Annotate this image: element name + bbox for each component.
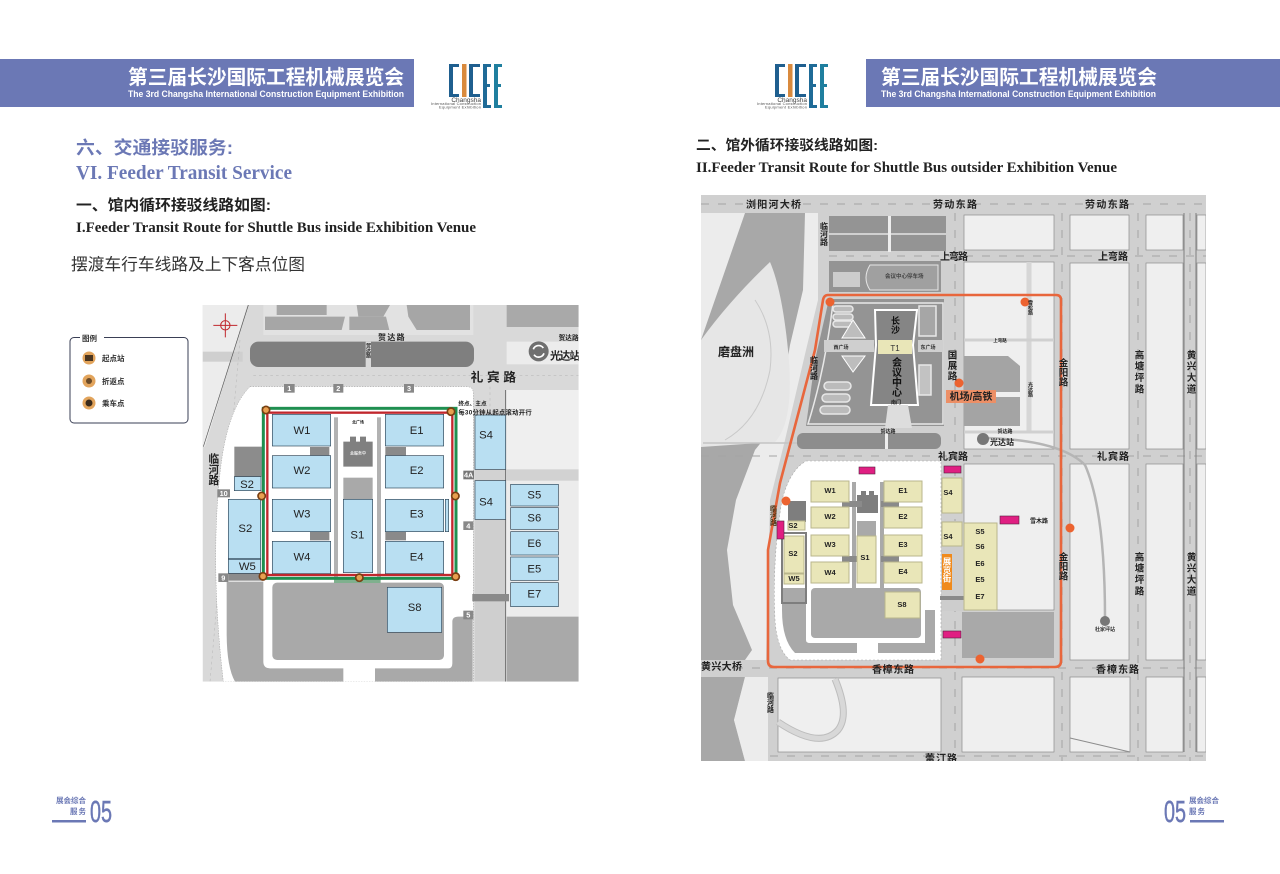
right footer page number: [1164, 794, 1224, 829]
left footer page number: 服务: [70, 806, 86, 816]
gate number markers: 9: [221, 573, 225, 582]
gate number markers: [217, 384, 474, 620]
hall labels: S8: [408, 602, 422, 614]
river and island: [701, 213, 820, 761]
left page CICEE logo: Changsha: [451, 97, 481, 104]
road names: 礼宾路: [938, 450, 968, 463]
convention centre: 会议中心停车场: [885, 272, 924, 280]
road labels: 贺达路: [378, 332, 405, 342]
road names: [701, 198, 1196, 765]
road names: 高塘坪路: [1132, 349, 1144, 395]
section heading: English: VI. Feeder Transit Service: [76, 162, 292, 184]
road names: 临河路: [810, 355, 818, 381]
section heading: Chinese: 六、交通接驳服务:: [76, 137, 233, 158]
gate number markers: 3: [407, 384, 411, 393]
left page CICEE logo: Equipment Exhibition: [439, 104, 481, 110]
metro line to Dujiaping station: 杜家坪站: [1095, 626, 1115, 633]
road names: 上弯路: [940, 250, 968, 263]
left page header banner: 第三届长沙国际工程机械展览会: [128, 66, 404, 89]
right footer page number: 服务: [1189, 806, 1206, 816]
exhibition halls: [228, 414, 558, 632]
hall labels on site map: E4: [898, 567, 908, 576]
hall labels on site map: S6: [975, 542, 985, 551]
hall labels: E7: [527, 589, 541, 601]
convention centre: 长沙: [890, 315, 900, 334]
hall labels on site map: S2: [788, 521, 798, 530]
hall labels: W2: [293, 465, 310, 477]
outside venue shuttle route map: [701, 195, 1206, 765]
road names: 临河路: [820, 221, 828, 247]
convention centre: 会议中心: [890, 356, 902, 397]
road names: 上弯路: [993, 337, 1007, 344]
right page CICEE logo: [757, 64, 828, 110]
hall labels on site map: W5: [788, 574, 800, 583]
hall labels on site map: [788, 486, 985, 609]
hall labels on site map: E2: [898, 512, 908, 521]
road names: 香樟东路: [872, 663, 914, 676]
road names: 雪木路: [1030, 517, 1048, 525]
hall labels on site map: S8: [897, 600, 907, 609]
road names: 贺达路: [880, 428, 896, 435]
road labels: 礼宾路: [471, 370, 516, 385]
hall labels: S4: [479, 496, 493, 508]
hall labels: W4: [293, 552, 310, 564]
orange stops on route: [782, 298, 1074, 664]
gate number markers: 1: [287, 384, 291, 393]
metro line to Dujiaping station: [985, 438, 1115, 633]
right page header banner: 第三届长沙国际工程机械展览会: [881, 66, 1157, 89]
right page header banner: [866, 59, 1280, 107]
gate number markers: 4: [466, 521, 471, 530]
metro icon: Guangda station: [529, 341, 549, 361]
road names: 雪松路: [1027, 299, 1033, 316]
left page CICEE logo: International Construction: [431, 101, 481, 106]
right page header banner: The 3rd Changsha International Construction Equipment Exhibition: [881, 89, 1156, 99]
convention centre: 东广场: [920, 344, 936, 351]
road names: 黄兴大桥: [701, 660, 742, 673]
hall labels on site map: W4: [824, 568, 836, 577]
hall labels on site map: S4: [943, 488, 953, 497]
gate number markers: 10: [220, 489, 228, 498]
left footer page number: 05: [90, 794, 112, 829]
central gate building and plaza: 北广场: [352, 418, 364, 424]
hall labels on site map: S5: [975, 527, 985, 536]
hall labels: W3: [293, 508, 310, 520]
left footer page number: [52, 794, 112, 829]
road labels: 光达站: [550, 349, 580, 362]
hall labels: E1: [410, 425, 424, 437]
road labels: 贺达路: [365, 343, 371, 360]
hall labels: S1: [350, 529, 364, 541]
left page header banner: The 3rd Changsha International Construction Equipment Exhibition: [128, 89, 404, 99]
road names: 蕾汀路: [925, 752, 957, 765]
road labels: 终点、主点: [458, 400, 487, 408]
compass: [213, 313, 237, 337]
parking and grey lots south of halls: [227, 447, 473, 682]
shuttle stops: [258, 406, 459, 581]
hall labels: S4: [479, 429, 493, 441]
subheading: inside venue route Chinese: 一、馆内循环接驳线路如图:: [76, 196, 271, 214]
central gate building and plaza: 总服务中: [350, 450, 366, 456]
subheading: inside venue route English: I.Feeder Transit Route for Shuttle Bus inside Exhibition Venue: [76, 220, 477, 236]
hall labels: [238, 425, 541, 614]
hall labels: E2: [410, 465, 424, 477]
legend item: boarding point: 乘车点: [102, 398, 125, 408]
road labels: 每30分钟从起点滚动开行: [458, 407, 532, 416]
central gate building and plaza: [310, 417, 406, 583]
hall labels on site map: W2: [824, 512, 836, 521]
hall labels on site map: W1: [824, 486, 836, 495]
convention centre: T1: [890, 344, 900, 353]
hall labels on site map: S1: [860, 553, 870, 562]
gate number markers: 5: [466, 611, 470, 620]
hall labels: E6: [527, 538, 541, 550]
magenta bus stop markers: [777, 466, 1019, 638]
road names: 光达路: [1027, 381, 1033, 398]
hall labels: E3: [410, 508, 424, 520]
darker edges of Huangxing Avenue: [1184, 213, 1196, 752]
hall labels on site map: W3: [824, 540, 836, 549]
hall labels on site map: E6: [975, 559, 985, 568]
road names: 劳动东路: [933, 198, 977, 211]
convention centre: 西广场: [833, 344, 849, 351]
hall labels: W5: [239, 561, 256, 573]
road names: 金阳路: [1056, 551, 1068, 581]
legend: [70, 333, 188, 423]
map caption: 摆渡车行车线路及上下客点位图: [71, 255, 305, 274]
hall labels on site map: E3: [898, 540, 908, 549]
road names: 高塘坪路: [1132, 551, 1144, 597]
road names: 礼宾路: [1097, 450, 1129, 463]
right footer page number: 展会综合: [1189, 795, 1220, 805]
road names: 黄兴大道: [1184, 551, 1196, 597]
hall labels: S2: [238, 523, 252, 535]
road labels: [207, 332, 580, 486]
legend item: start stop: 起点站: [102, 353, 125, 363]
hall labels: S2: [240, 479, 254, 491]
gate number markers: 4A: [464, 471, 474, 480]
hall labels: W1: [293, 425, 310, 437]
right page CICEE logo: International Construction: [757, 101, 807, 106]
road labels: 临河路: [207, 453, 219, 486]
inside venue shuttle route map: [203, 305, 580, 682]
road names: 浏阳河大桥: [746, 198, 801, 211]
right page CICEE logo: Equipment Exhibition: [765, 104, 807, 110]
exhibition site: [774, 461, 964, 660]
road names: 临河路: [770, 504, 777, 527]
metro icon: Guangda station: 光达站: [990, 437, 1014, 447]
road labels: 贺达路: [559, 333, 579, 342]
airport and high-speed rail label: 机场/高铁: [950, 390, 992, 403]
road names: 金阳路: [1056, 357, 1068, 387]
gate number markers: 2: [336, 384, 340, 393]
subheading: outside venue route English: II.Feeder Transit Route for Shuttle Bus outsider Exhibition Venue: [696, 160, 1117, 176]
hall labels on site map: E5: [975, 575, 985, 584]
left page header banner: [0, 59, 414, 107]
convention centre: 南门: [891, 399, 901, 406]
hall labels on site map: S4: [943, 532, 953, 541]
hall labels: E5: [527, 564, 541, 576]
legend item: turnaround point: 折返点: [102, 376, 125, 386]
city blocks: [778, 215, 1206, 752]
ramp and small side roads: [778, 262, 1130, 752]
left page CICEE logo: [431, 64, 502, 110]
hall labels: S5: [527, 490, 541, 502]
road names: 国展路: [946, 350, 957, 382]
exhibition halls on site map: [784, 478, 997, 618]
road names: 上弯路: [1098, 250, 1128, 263]
orange shuttle route: [768, 295, 1061, 667]
road names: 临河路: [766, 691, 774, 714]
hall labels: S6: [527, 513, 541, 525]
legend: 图例: [82, 333, 97, 343]
road names: 黄兴大道: [1184, 349, 1196, 395]
roads centre lines: [701, 204, 1206, 761]
left footer page number: 展会综合: [56, 795, 86, 805]
convention centre: [824, 272, 943, 428]
road names: 磨盘洲: [718, 344, 754, 359]
grey lots and buildings: [797, 216, 1054, 658]
right footer page number: 05: [1164, 794, 1186, 829]
right page CICEE logo: Changsha: [777, 97, 807, 104]
hall labels on site map: S2: [788, 549, 798, 558]
hall labels on site map: E1: [898, 486, 908, 495]
hall labels: E4: [410, 552, 424, 564]
exhibition street orange marker: 展览街: [942, 557, 952, 583]
hall labels on site map: E7: [975, 592, 985, 601]
road names: 劳动东路: [1085, 198, 1129, 211]
shuttle route: green and red loops: [263, 408, 456, 578]
parking outline around convention centre: [808, 303, 943, 424]
metro icon: Guangda station: [977, 433, 1014, 447]
road names: 贺达路: [997, 428, 1013, 435]
subheading: outside venue route Chinese: 二、馆外循环接驳线路如图:: [696, 137, 878, 153]
road names: 香樟东路: [1096, 663, 1139, 676]
